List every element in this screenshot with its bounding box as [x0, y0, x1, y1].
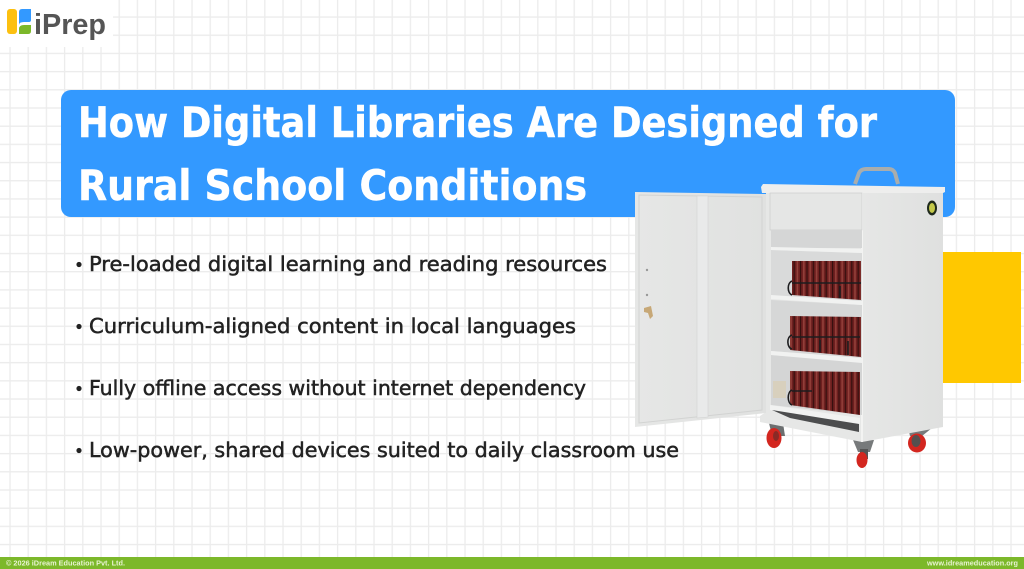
- title heading: [78, 98, 877, 210]
- door stripe: [697, 196, 708, 418]
- panel: title banner: [61, 90, 955, 217]
- shelf compartments: [771, 250, 862, 302]
- inner label: [773, 381, 786, 398]
- power switch sticker: [927, 200, 937, 216]
- cabinet lid: [761, 184, 945, 193]
- bottom tray: [772, 410, 859, 432]
- footer website: www.idreameducation.org: [926, 558, 1018, 568]
- logo: iPrep: [7, 9, 106, 41]
- title heading: How Digital Libraries Are Designed for: [78, 98, 877, 147]
- illustration: charging cabinet: [635, 169, 945, 468]
- cabinet side panel: [862, 190, 943, 442]
- shelves: [770, 247, 862, 424]
- cabinet wheels: [766, 423, 932, 468]
- footer bar: [0, 557, 1024, 569]
- tablets row 1: [792, 261, 861, 300]
- bullet 3: Fully offline access without internet dependency: [89, 376, 586, 400]
- bullet 2: Curriculum-aligned content in local languages: [89, 314, 576, 338]
- yellow accent block: [943, 252, 1021, 383]
- shelf compartment top: [771, 230, 862, 248]
- bullet 4: Low-power, shared devices suited to daily classroom use: [89, 438, 679, 462]
- logo wordmark: iPrep: [34, 9, 106, 41]
- cabinet handle: [855, 169, 898, 184]
- wheel middle: [853, 440, 874, 468]
- cabinet body front: [760, 190, 862, 442]
- wheel right: [908, 428, 932, 452]
- wheel left: [766, 423, 785, 448]
- charging cables: [788, 281, 861, 405]
- drawer panel: [770, 193, 862, 230]
- cabinet door: [635, 192, 766, 427]
- bullet 1: Pre-loaded digital learning and reading resources: [89, 252, 607, 276]
- title heading: Rural School Conditions: [78, 161, 587, 210]
- tablets row 3: [790, 371, 860, 415]
- door lock: [644, 306, 653, 319]
- tablets row 2: [790, 316, 861, 357]
- icon: logo mark: [7, 9, 31, 34]
- bullet list: [76, 252, 679, 462]
- footer copyright: © 2026 iDream Education Pvt. Ltd.: [6, 558, 125, 568]
